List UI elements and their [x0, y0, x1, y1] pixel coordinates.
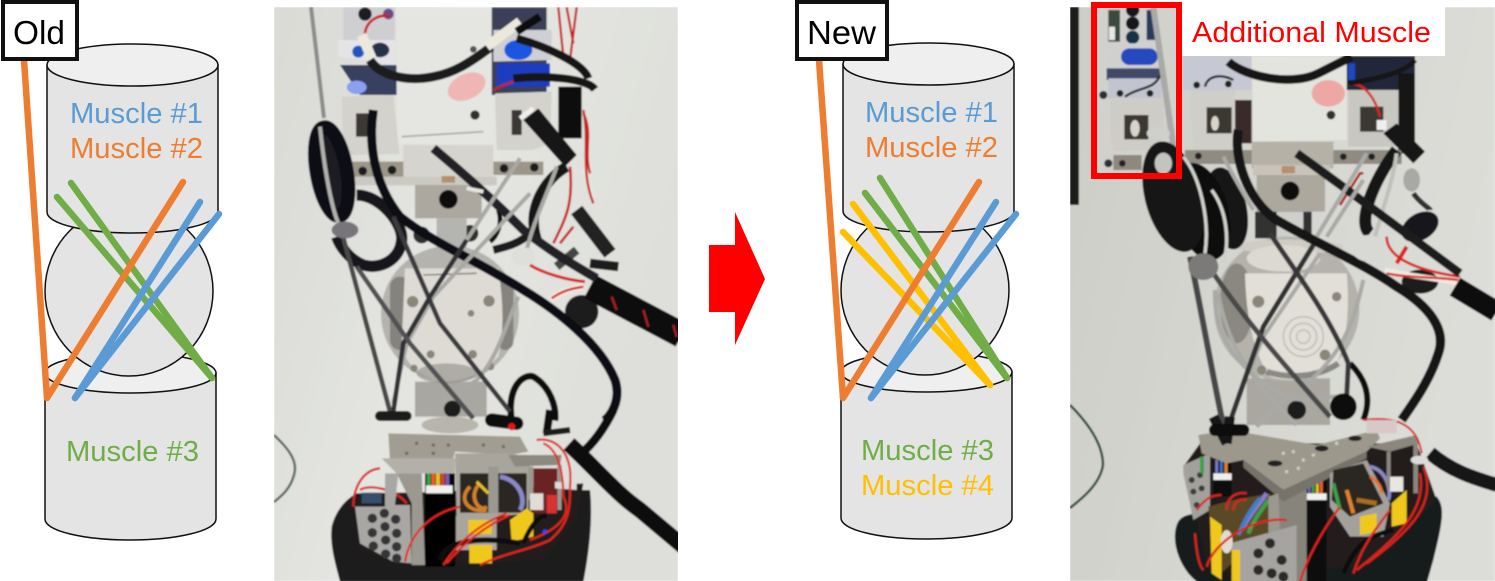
lower cylinder [841, 352, 1012, 539]
neck, sphere, rings and cables [1131, 123, 1495, 427]
electronics and sleeve [1175, 417, 1442, 581]
badge: Old [3, 2, 77, 59]
sphere joint [841, 205, 1009, 375]
badge: New: New [807, 14, 876, 51]
lower spiral tube [1430, 453, 1495, 485]
muscle 2 line [24, 60, 183, 398]
label box: Additional Muscle: Additional Muscle [1192, 17, 1431, 49]
muscle 1 lines [871, 202, 1016, 398]
label: Muscle #2: Muscle #2 [70, 133, 203, 165]
upper cylinder [47, 44, 218, 233]
highlight: additional muscle module [1094, 5, 1179, 176]
wires and tube [530, 265, 585, 282]
muscle 3 lines [57, 183, 212, 378]
label: Muscle #1: Muscle #1 [70, 98, 203, 130]
muscle 2 line [819, 60, 979, 398]
rubber rings [309, 125, 354, 219]
badge: Old: Old [13, 14, 65, 51]
wires and ferrites [1413, 193, 1430, 210]
rubber rings [1210, 166, 1249, 250]
sphere [381, 246, 519, 382]
electronics and sleeve [331, 410, 613, 581]
dark ropes [342, 217, 510, 418]
muscle 4 lines [843, 204, 990, 385]
arrow: old to new [709, 212, 765, 345]
label: Muscle #1: Muscle #1 [865, 97, 998, 129]
lower spiral tube [569, 444, 690, 552]
badge: New [797, 2, 887, 59]
photo: old robot neck [274, 7, 690, 581]
muscle 1 lines [75, 202, 219, 398]
lower cylinder [45, 353, 216, 540]
top hardware [338, 7, 595, 173]
sphere joint [45, 206, 213, 376]
black cables [1237, 130, 1440, 420]
black cables [372, 110, 617, 421]
photo: new robot neck with additional muscle [1070, 3, 1495, 581]
top hardware and additional module [1098, 3, 1415, 171]
silver ropes [393, 158, 557, 415]
muscle 3 lines [865, 178, 1007, 378]
label: Muscle #3: Muscle #3 [861, 435, 994, 467]
label: Muscle #3: Muscle #3 [66, 436, 199, 468]
panel: old muscle diagram [3, 2, 219, 540]
dark ropes [1190, 233, 1348, 425]
label: Muscle #4: Muscle #4 [861, 470, 994, 502]
sphere [1214, 237, 1359, 381]
label box: Additional Muscle [1182, 7, 1445, 56]
panel: new muscle diagram [797, 2, 1016, 539]
silver ropes [1215, 153, 1367, 427]
upper cylinder [843, 43, 1014, 232]
neck, sphere, rings and cables [309, 110, 682, 421]
label: Muscle #2: Muscle #2 [865, 132, 998, 164]
